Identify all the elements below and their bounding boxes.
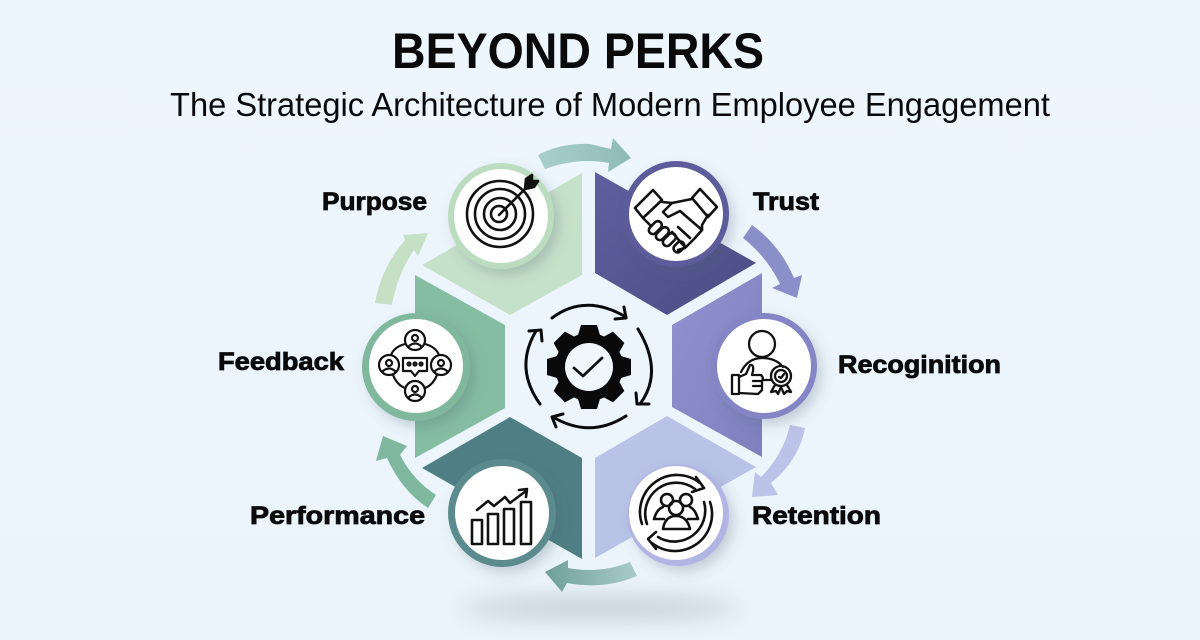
node: performance <box>448 459 556 567</box>
icon: person with thumbs up and badge <box>732 331 791 394</box>
icon: handshake <box>635 189 717 254</box>
segment: recognition <box>672 273 762 457</box>
node: recognition <box>711 313 817 419</box>
label: performance: Performance <box>250 502 425 530</box>
label: trust: Trust <box>753 188 820 216</box>
check mark <box>574 358 602 376</box>
segment: performance <box>422 417 582 559</box>
arrow: trust to recognition <box>743 225 802 298</box>
subtitle: The Strategic Architecture of Modern Employee Engagement <box>170 86 1050 123</box>
segment: trust <box>595 172 756 315</box>
node: purpose <box>448 163 554 269</box>
segment: purpose <box>422 173 582 315</box>
icon: people with cycle arrows <box>640 475 712 551</box>
label: purpose: Purpose <box>322 188 427 216</box>
icon: team feedback network <box>379 330 451 401</box>
label: feedback: Feedback <box>218 348 344 376</box>
segment: feedback <box>415 275 505 458</box>
node: retention <box>627 464 729 566</box>
arrow: performance to feedback <box>376 436 436 508</box>
node: trust <box>623 161 729 267</box>
icon: target <box>467 175 538 247</box>
arrow: feedback to purpose <box>375 233 428 305</box>
icon: rising bar chart <box>472 489 531 544</box>
segment: retention <box>595 416 756 558</box>
label: retention: Retention <box>752 502 881 530</box>
title: BEYOND PERKS <box>392 23 764 79</box>
center icon: gear with check and cycle arrows <box>526 305 652 428</box>
node: feedback <box>362 313 470 421</box>
gear <box>547 325 631 409</box>
label: recognition: Recoginition <box>838 351 1001 379</box>
arrow: recognition to retention <box>752 425 805 497</box>
arrow: retention to performance <box>545 560 637 592</box>
cycle arrows <box>526 305 652 428</box>
arrow: purpose to trust <box>538 138 631 172</box>
